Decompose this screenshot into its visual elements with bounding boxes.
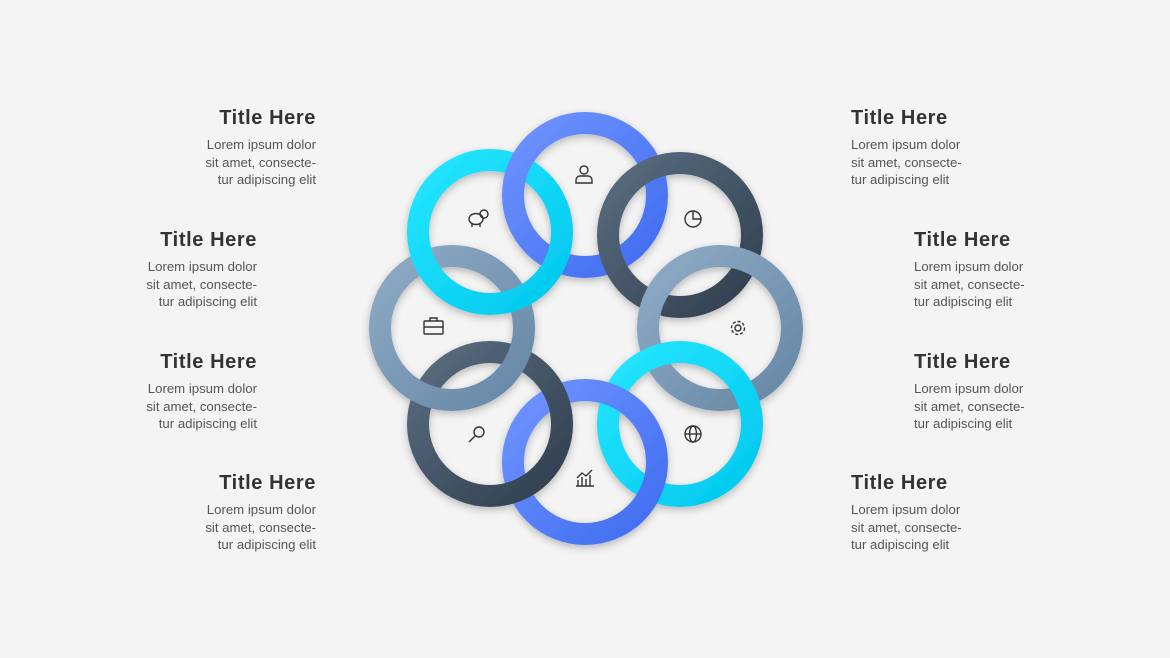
text block: left 3: [146, 351, 257, 431]
text block: left 1: sit amet, consecte-: [205, 154, 316, 170]
text block: right 4: Lorem ipsum dolor: [851, 502, 960, 517]
text block: right 1: Lorem ipsum dolor: [851, 137, 960, 152]
ring 1 top blue: [513, 123, 657, 267]
text block: right 1: [851, 107, 962, 187]
text block: right 3: tur adipiscing elit: [914, 416, 1012, 431]
text block: left 4: Title Here: [219, 472, 316, 494]
ring 5 bottom blue: [513, 390, 657, 534]
text block: right 2: sit amet, consecte-: [914, 276, 1025, 292]
text block: left 2: [146, 229, 257, 309]
text block: left 4: Lorem ipsum dolor: [207, 502, 316, 517]
ring 1 overlap segment: [503, 144, 538, 187]
text block: left 3: sit amet, consecte-: [146, 398, 257, 414]
text block: right 2: Lorem ipsum dolor: [914, 259, 1023, 274]
text block: right 2: Title Here: [914, 229, 1011, 251]
ring 8 top-left cyan: [418, 160, 562, 304]
ring 7 left grey: [380, 256, 524, 400]
text block: left 2: Title Here: [160, 229, 257, 251]
icon: gear: [732, 322, 744, 334]
text block: left 2: sit amet, consecte-: [146, 276, 257, 292]
text block: right 2: tur adipiscing elit: [914, 294, 1012, 309]
text block: left 1: tur adipiscing elit: [218, 172, 316, 187]
chain rings diagram: [365, 111, 807, 552]
text block: left 1: [205, 107, 316, 187]
text block: left 1: Title Here: [219, 107, 316, 129]
text block: right 4: [851, 472, 962, 552]
icon: user: [576, 166, 592, 183]
icon: pie chart: [685, 211, 701, 227]
text block: right 3: [914, 351, 1025, 431]
text block: left 2: tur adipiscing elit: [159, 294, 257, 309]
ring 3 right grey: [648, 256, 792, 400]
icon: bar chart: [576, 470, 594, 486]
text block: right 4: tur adipiscing elit: [851, 537, 949, 552]
text block: right 4: sit amet, consecte-: [851, 520, 962, 534]
text block: right 1: tur adipiscing elit: [851, 172, 949, 187]
text block: left 3: tur adipiscing elit: [159, 416, 257, 431]
icon: piggy bank: [469, 210, 488, 227]
text block: left 4: [205, 472, 316, 552]
ring 2 top-right dark: [608, 163, 752, 307]
text block: right 1: sit amet, consecte-: [851, 154, 962, 170]
text block: left 2: Lorem ipsum dolor: [148, 259, 257, 274]
text block: left 4: sit amet, consecte-: [205, 520, 316, 534]
text block: left 3: Title Here: [160, 351, 257, 373]
text block: right 1: Title Here: [851, 107, 948, 129]
icon: globe: [685, 426, 701, 442]
icon: briefcase: [424, 318, 443, 334]
text block: right 3: Title Here: [914, 351, 1011, 373]
ring 6 bottom-left dark: [418, 352, 562, 496]
text block: left 1: Lorem ipsum dolor: [207, 137, 316, 152]
text block: left 4: tur adipiscing elit: [218, 537, 316, 552]
text block: left 3: Lorem ipsum dolor: [148, 381, 257, 396]
icon: magnifier: [469, 427, 484, 442]
ring 4 bottom-right cyan: [608, 352, 752, 496]
text block: right 3: sit amet, consecte-: [914, 398, 1025, 414]
text block: right 3: Lorem ipsum dolor: [914, 381, 1023, 396]
text block: right 2: [914, 229, 1025, 309]
text block: right 4: Title Here: [851, 472, 948, 494]
